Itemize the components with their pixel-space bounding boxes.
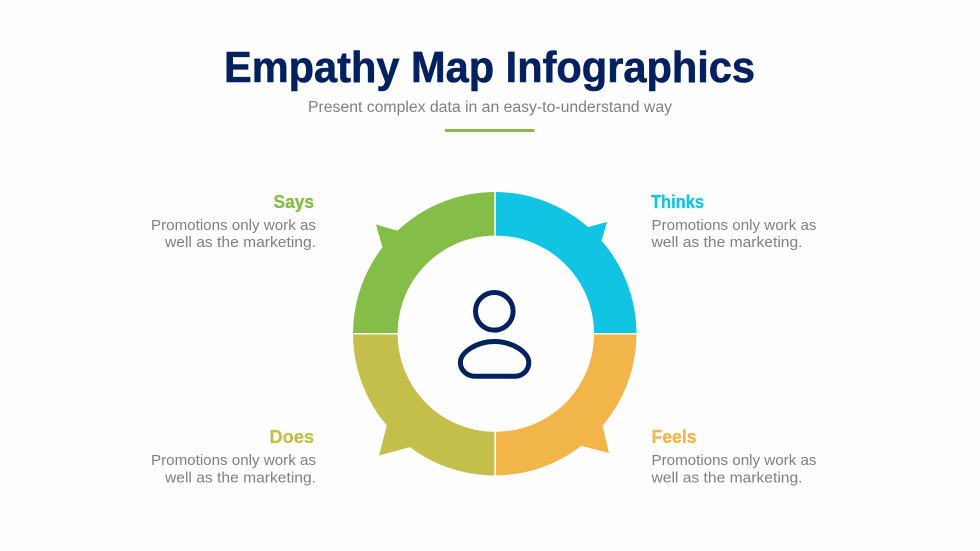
heading: says: Says bbox=[274, 191, 314, 212]
text block: says bbox=[151, 217, 316, 251]
text block: does: Promotions only work as bbox=[151, 452, 316, 469]
heading: thinks: Thinks bbox=[651, 191, 704, 212]
panel: thinks bbox=[650, 191, 816, 251]
circular diagram bbox=[353, 192, 636, 476]
panel: says bbox=[151, 191, 316, 251]
text block: does: well as the marketing. bbox=[164, 470, 316, 486]
text block: thinks: well as the marketing. bbox=[650, 234, 802, 251]
icon: person bbox=[460, 292, 529, 376]
text block: feels: Promotions only work as bbox=[652, 452, 816, 469]
text block: says: Promotions only work as bbox=[151, 217, 316, 234]
text block: thinks: Promotions only work as bbox=[652, 217, 816, 234]
text block: feels: well as the marketing. bbox=[650, 470, 802, 486]
segment: says bbox=[353, 192, 494, 333]
panel: does bbox=[151, 426, 316, 486]
panel: feels bbox=[650, 426, 816, 486]
subtitle: Present complex data in an easy-to-understand way bbox=[308, 99, 672, 116]
text block: says: well as the marketing. bbox=[164, 234, 316, 251]
segment: thinks bbox=[496, 192, 636, 333]
segment: feels bbox=[496, 334, 636, 476]
heading: does: Does bbox=[270, 426, 314, 447]
heading: feels: Feels bbox=[652, 426, 696, 447]
text block: does bbox=[151, 452, 316, 486]
title underline bbox=[445, 129, 534, 132]
title: Empathy Map Infographics bbox=[224, 43, 755, 92]
text block: feels bbox=[650, 452, 816, 486]
segment: does bbox=[353, 334, 494, 476]
text block: thinks bbox=[650, 217, 816, 251]
